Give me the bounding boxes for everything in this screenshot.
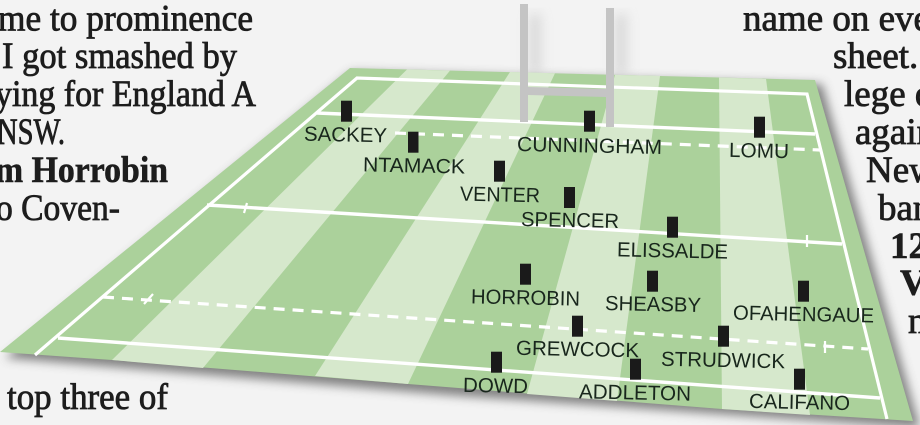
text block: left column <box>0 0 256 418</box>
pitch markings <box>35 78 887 419</box>
player: Sheasby: SHEASBY <box>605 292 702 317</box>
player: Grewcock: GREWCOCK <box>516 337 640 362</box>
player: Ofahengaue: OFAHENGAUE <box>733 302 874 327</box>
player: Elissalde: ELISSALDE <box>617 238 728 264</box>
goalposts <box>520 4 614 127</box>
player: Lomu <box>729 117 789 163</box>
player: Sheasby <box>605 271 702 317</box>
player: Cunningham <box>517 111 662 159</box>
player: Strudwick <box>661 326 786 373</box>
player: Sackey <box>304 101 388 147</box>
player: Ntamack <box>363 132 466 179</box>
text block: right column <box>743 0 920 342</box>
player: Venter <box>460 161 540 207</box>
player: Califano <box>749 369 850 415</box>
player: Addleton <box>579 359 691 406</box>
player: Sackey: SACKEY <box>304 123 388 147</box>
player: Elissalde <box>617 217 728 264</box>
player: Strudwick: STRUDWICK <box>661 348 786 373</box>
player: Dowd <box>463 352 528 398</box>
player: Dowd: DOWD <box>463 374 528 398</box>
text block: left column: m Horrobin <box>0 150 168 191</box>
player: Ofahengaue <box>733 281 874 327</box>
player: Horrobin <box>471 264 580 311</box>
text block: left column: I got smashed by <box>2 36 237 77</box>
player: Ntamack: NTAMACK <box>363 153 466 179</box>
text block: left column: ying for England A <box>0 74 256 115</box>
text block: left column: top three of <box>7 377 169 418</box>
player: Grewcock <box>516 316 640 362</box>
text block: right column: sheet. <box>833 36 918 77</box>
player: Califano: CALIFANO <box>749 390 850 415</box>
player: Cunningham: CUNNINGHAM <box>517 133 662 159</box>
goalpost shadows <box>530 14 626 76</box>
player: Spencer: SPENCER <box>521 208 619 233</box>
text block: left column: o Coven- <box>0 188 120 229</box>
player: Addleton: ADDLETON <box>579 380 691 406</box>
pitch light stripes <box>112 70 810 415</box>
player: Venter: VENTER <box>460 183 540 207</box>
player: Lomu: LOMU <box>729 139 789 163</box>
player: Horrobin: HORROBIN <box>471 285 580 311</box>
player: Spencer <box>521 187 619 233</box>
